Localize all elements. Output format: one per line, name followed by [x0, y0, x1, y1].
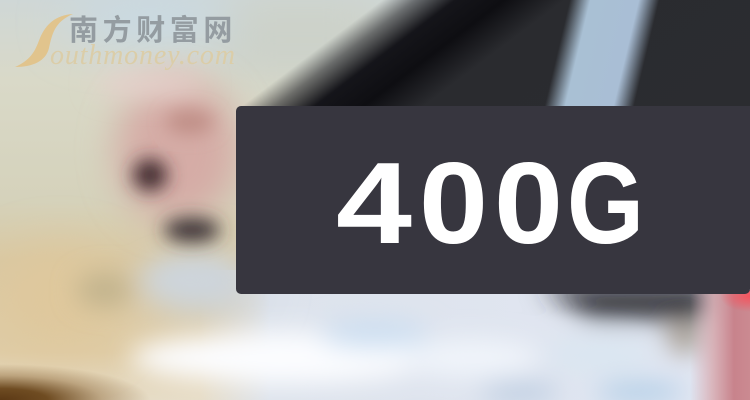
logo: southmoney	[15, 7, 237, 71]
logo swoosh S	[15, 14, 73, 67]
logo Chinese name: 南方财富网	[69, 7, 237, 49]
background: brown corner	[0, 355, 170, 400]
title: 400G: 0	[419, 138, 488, 268]
title: 400G	[336, 138, 644, 268]
logo latin name: outhmoney.com	[50, 40, 235, 71]
background: dark suit	[236, 0, 750, 110]
title: 400G: G	[567, 138, 644, 268]
title panel	[236, 106, 750, 294]
background: red highlight	[715, 290, 750, 320]
background: lower right paper	[200, 270, 750, 400]
title: 400G: 4	[336, 138, 412, 268]
background: light blue shirt	[500, 0, 750, 110]
background: red edge	[690, 290, 750, 400]
title: 400G: 0	[494, 138, 563, 268]
